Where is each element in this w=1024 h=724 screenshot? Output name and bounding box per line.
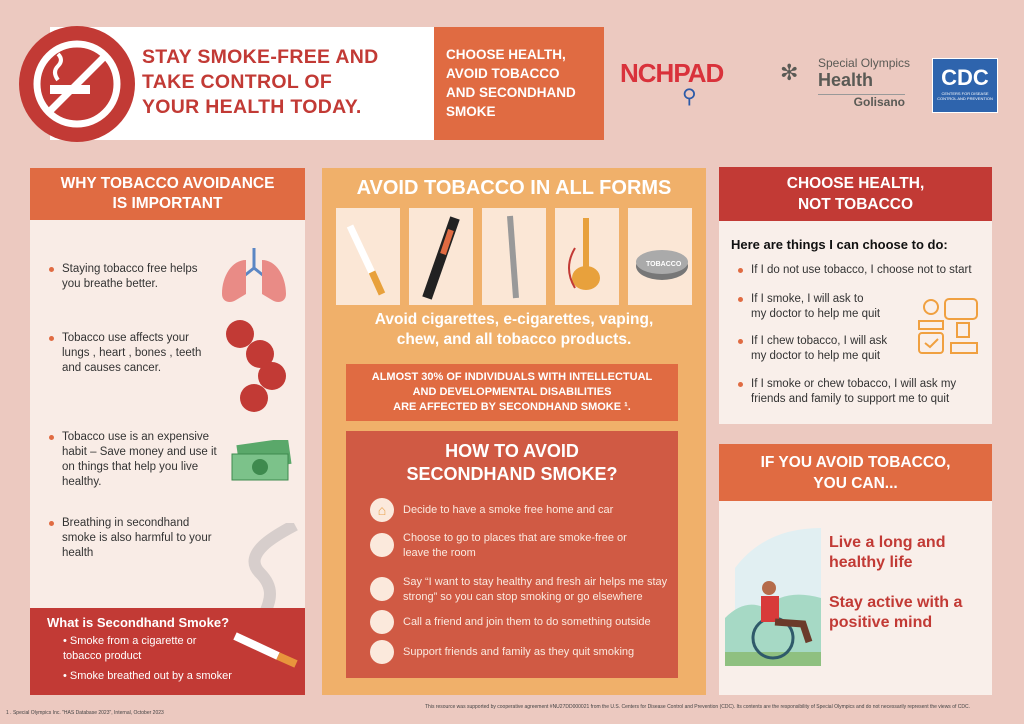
logo: CDC: CDC xyxy=(941,65,989,90)
icon: smoke xyxy=(248,523,298,608)
panel title: AVOID TOBACCO IN ALL FORMS xyxy=(357,176,671,198)
subtitle box: SMOKE xyxy=(446,104,496,119)
item: say xyxy=(370,576,668,603)
item: home xyxy=(370,498,614,522)
logo: Special Olympics Health: ✻ xyxy=(780,60,798,85)
intro text: Here are things I can choose to do: xyxy=(731,237,948,252)
bullet: secondhand: Breathing in secondhand smoke is also harmful to your health xyxy=(62,517,212,559)
panel header: IS IMPORTANT xyxy=(113,195,222,212)
item: smoke-free places: Choose to go to places that are smoke-free or xyxy=(403,532,627,544)
panel header: WHY TOBACCO AVOIDANCE xyxy=(61,175,274,192)
item: say: Say “I want to stay healthy and fresh air helps me stay xyxy=(403,576,667,588)
bullet: organs: Tobacco use affects your lungs , heart , bones , teeth and causes cancer. xyxy=(62,332,201,374)
product tiles: TOBACCO xyxy=(646,261,682,268)
subtitle box: AVOID TOBACCO xyxy=(446,66,560,81)
item: say: strong” so you can stop smoking or go elsewhere xyxy=(403,591,643,603)
stat box: ALMOST 30% OF INDIVIDUALS WITH INTELLECTUAL xyxy=(372,371,652,383)
panel: choose health not tobacco: If I smoke, I will ask to xyxy=(751,293,863,305)
icon: doctor consultation xyxy=(918,298,978,354)
title: TAKE CONTROL OF xyxy=(142,71,332,93)
panel: choose health not tobacco: If I chew tobacco, I will ask xyxy=(751,335,887,347)
logo: Special Olympics Health: Special Olympics xyxy=(818,56,910,70)
item: support: Support friends and family as they quit smoking xyxy=(403,646,634,658)
panel: choose health not tobacco: friends and family to support me to quit xyxy=(751,393,949,405)
tagline: Avoid cigarettes, e-cigarettes, vaping, xyxy=(375,311,653,328)
secondhand smoke box: What is Secondhand Smoke? xyxy=(47,615,229,630)
item: support xyxy=(370,640,634,664)
subtitle box xyxy=(434,27,604,140)
panel: choose health not tobacco: my doctor to help me quit xyxy=(751,350,880,362)
how to avoid title: SECONDHAND SMOKE? xyxy=(406,464,618,484)
title: YOUR HEALTH TODAY. xyxy=(142,96,362,118)
logo: Special Olympics Health xyxy=(780,56,910,109)
logo: CDC: CENTERS FOR DISEASE CONTROL AND PREVENTION xyxy=(937,91,993,101)
logo: NCHPAD: ⚲ xyxy=(682,86,696,108)
panel: if you avoid tobacco xyxy=(719,444,992,695)
panel header: IF YOU AVOID TOBACCO, xyxy=(761,454,950,470)
title xyxy=(142,46,378,118)
item: smoke-free places xyxy=(370,532,627,559)
item: home: Decide to have a smoke free home and car xyxy=(403,504,613,516)
panel: choose health not tobacco: If I smoke or chew tobacco, I will ask my xyxy=(751,378,956,390)
icon: organ circles xyxy=(226,320,286,412)
illustration: wheelchair user xyxy=(725,528,821,666)
stat box: AND DEVELOPMENTAL DISABILITIES xyxy=(413,386,611,398)
benefit text xyxy=(829,534,962,631)
how to avoid box xyxy=(346,431,678,678)
panel: choose health not tobacco: my doctor to help me quit xyxy=(751,308,880,320)
panel header: CHOOSE HEALTH, xyxy=(787,175,924,192)
subtitle box: AND SECONDHAND xyxy=(446,85,576,100)
icon: money xyxy=(232,440,292,480)
logo: Special Olympics Health: Golisano xyxy=(854,95,905,109)
stat box xyxy=(346,364,678,421)
item: smoke-free places: leave the room xyxy=(403,547,476,559)
panel header xyxy=(719,444,992,501)
panel header: YOU CAN... xyxy=(813,474,898,492)
footnote: 1 . Special Olympics Inc. "HAS Database 2023", Internal, October 2023 xyxy=(6,710,164,716)
product tiles xyxy=(336,208,692,305)
icon: lungs xyxy=(222,248,286,302)
benefit text: Live a long and healthy life xyxy=(829,534,945,571)
logo: Special Olympics Health: Health xyxy=(818,70,873,90)
panel header xyxy=(30,168,305,220)
stat box: ARE AFFECTED BY SECONDHAND SMOKE ¹. xyxy=(393,401,631,413)
how to avoid title: HOW TO AVOID xyxy=(445,441,579,461)
tagline: chew, and all tobacco products. xyxy=(397,331,631,348)
panel: why tobacco avoidance xyxy=(30,168,305,695)
subtitle box: CHOOSE HEALTH, xyxy=(446,47,566,62)
funding disclaimer: This resource was supported by cooperative agreement #NU27DD000021 from the U.S. Centers for Disease Control and Prevention (CDC). Its contents are the responsibility of Special Olympics and do not necessarily represent the views of CDC. xyxy=(425,704,970,710)
header white box xyxy=(50,27,434,140)
bullets: If I do not use tobacco, I choose not to start xyxy=(751,264,972,276)
item: call a friend: Call a friend and join them to do something outside xyxy=(403,616,651,628)
benefit text: Stay active with a positive mind xyxy=(829,594,962,631)
item: home: ⌂ xyxy=(378,502,386,518)
logo: NCHPAD: NCHPAD xyxy=(620,58,723,88)
logo: NCHPAD xyxy=(620,58,724,108)
bullet: breathe: Staying tobacco free helps you breathe better. xyxy=(62,263,198,290)
panel header xyxy=(719,167,992,221)
panel: choose health not tobacco xyxy=(719,167,992,424)
item: call a friend xyxy=(370,610,651,634)
logo: CDC xyxy=(932,58,998,113)
panel header: NOT TOBACCO xyxy=(798,196,913,213)
panel: avoid tobacco in all forms xyxy=(322,168,706,695)
secondhand smoke box: • Smoke breathed out by a smoker xyxy=(63,670,232,682)
bullet: expensive: Tobacco use is an expensive habit – Save money and use it on things that help you live healthy. xyxy=(62,431,217,488)
secondhand smoke box: • Smoke from a cigarette or tobacco product xyxy=(63,635,196,662)
how to avoid title xyxy=(406,441,618,484)
tagline xyxy=(375,311,653,348)
header banner xyxy=(19,26,604,142)
icon: no smoking circle xyxy=(19,26,135,142)
title: STAY SMOKE-FREE AND xyxy=(142,46,378,68)
secondhand smoke box xyxy=(30,608,305,695)
icon: cigarette xyxy=(233,632,298,668)
